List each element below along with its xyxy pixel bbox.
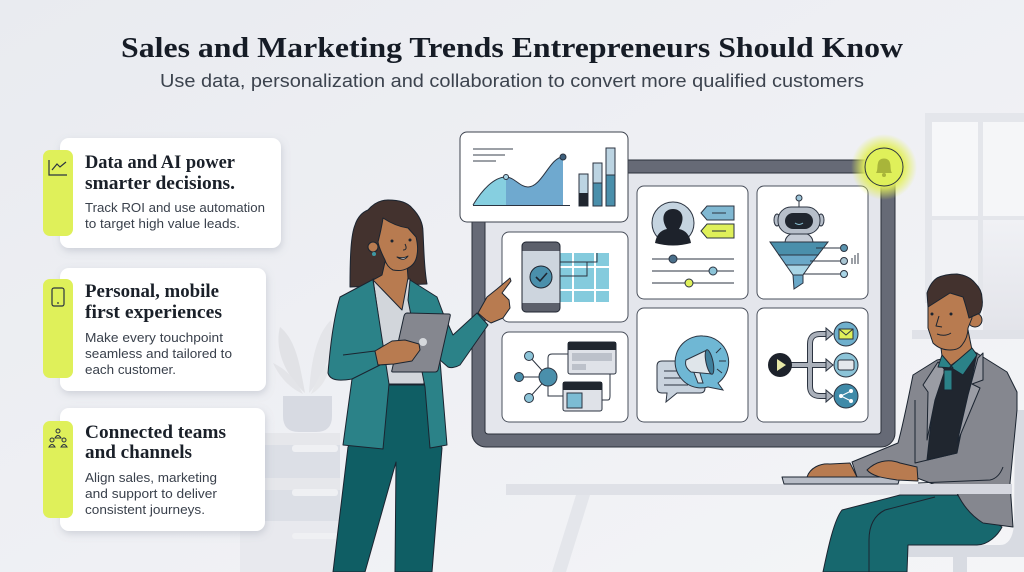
man hair (927, 274, 982, 318)
panel: connected teams (43, 408, 265, 531)
hands (807, 463, 857, 477)
background: plant and shelf (240, 320, 340, 572)
card: network (502, 332, 628, 422)
collar (938, 348, 977, 375)
chair (908, 410, 1024, 572)
lapels (923, 362, 945, 440)
neck (940, 330, 972, 366)
heading: connected teams: Connected teams (85, 423, 226, 443)
card: profile and sliders (637, 186, 748, 299)
icon: team (49, 429, 67, 447)
pointing hand (478, 278, 511, 323)
pants (333, 385, 442, 572)
body: connected teams: Align sales, marketing (85, 470, 217, 485)
background: window (912, 113, 1024, 339)
ear (968, 313, 982, 327)
title: Sales and Marketing Trends Entrepreneurs Should Know (121, 32, 903, 64)
panel: data and AI (43, 138, 281, 248)
heading: personal mobile: first experiences (85, 303, 222, 323)
heading: data and AI: Data and AI power (85, 153, 235, 173)
card: floating chart (460, 132, 628, 222)
head (928, 290, 972, 350)
jacket (852, 352, 1017, 527)
body: connected teams: and support to deliver (85, 486, 218, 501)
keyboard (782, 477, 900, 484)
heading: personal mobile: Personal, mobile (85, 282, 219, 302)
hair (350, 200, 427, 287)
body: data and AI: to target high value leads. (85, 216, 240, 231)
icon: notification bell (851, 134, 917, 200)
card: megaphone and chat (637, 308, 748, 422)
tablet (392, 313, 450, 372)
body: connected teams: consistent journeys. (85, 502, 205, 517)
jacket (328, 280, 389, 449)
desk (506, 484, 1012, 572)
body: personal mobile: Make every touchpoint (85, 330, 223, 345)
sleeve lines (915, 400, 1003, 483)
subtitle: Use data, personalization and collaboration to convert more qualified customers (160, 70, 864, 91)
person: presenter (328, 200, 511, 572)
neck (373, 262, 408, 310)
heading: data and AI: smarter decisions. (85, 174, 235, 194)
hand on tablet (375, 340, 420, 365)
card: robot and funnel (757, 186, 868, 299)
desk front edge (900, 484, 1012, 494)
legs (823, 495, 1002, 572)
card: phone and grid (502, 232, 628, 322)
icon: line chart (49, 160, 67, 175)
shirt (373, 279, 424, 384)
ear (368, 242, 378, 252)
heading: connected teams: and channels (85, 443, 192, 463)
face (378, 218, 418, 271)
body: personal mobile: seamless and tailored to (85, 346, 232, 361)
monitor (472, 160, 895, 447)
person: man at desk (782, 274, 1017, 572)
card: play and channels (757, 308, 868, 422)
body: personal mobile: each customer. (85, 362, 176, 377)
body: data and AI: Track ROI and use automation (85, 200, 265, 215)
icon: phone (52, 288, 64, 306)
dark shirt (927, 353, 977, 460)
panel: personal mobile (43, 268, 266, 391)
